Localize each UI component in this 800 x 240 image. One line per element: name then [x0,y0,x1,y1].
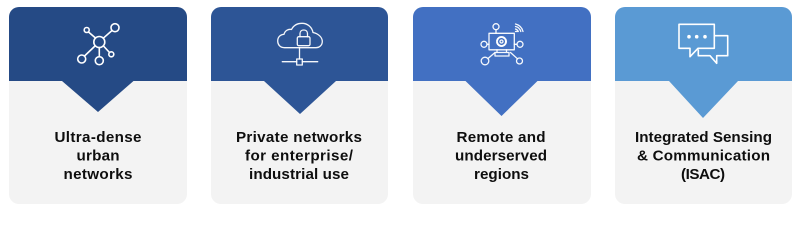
panel: ultra-dense urban networks [9,7,187,204]
label: integrated sensing and communication: (ISAC) [681,166,725,183]
label: private networks [236,129,362,183]
panel: private networks [211,7,388,204]
label: ultra-dense urban networks: networks [64,166,132,183]
label: remote and underserved regions: Remote and [456,129,546,146]
label: private networks: for enterprise/ [245,148,354,164]
card header with pointer [615,7,792,118]
label: ultra-dense urban networks [54,129,142,183]
label: private networks: industrial use [249,166,349,183]
label: remote and underserved regions [455,129,547,183]
card header with pointer [211,7,388,114]
icon: cloud with padlock and network [278,23,322,65]
card body [211,7,388,204]
label: ultra-dense urban networks: Ultra-dense [54,129,142,146]
card header with pointer [9,7,187,112]
icon: network nodes [78,24,119,65]
label: ultra-dense urban networks: urban [76,148,120,164]
icon: speech bubbles [679,24,728,63]
label: remote and underserved regions: regions [474,166,529,183]
label: integrated sensing and communication [635,129,772,183]
panel: remote and underserved regions [413,7,591,204]
card body [9,7,187,204]
card header with pointer [413,7,591,116]
panel: integrated sensing and communication [615,7,792,204]
label: integrated sensing and communication: & Communication [637,148,770,164]
icon: monitor with gear and connected nodes [481,24,523,65]
label: remote and underserved regions: underserved [455,148,547,164]
card body [413,7,591,204]
card body [615,7,792,204]
label: integrated sensing and communication: Integrated Sensing [635,129,772,146]
label: private networks: Private networks [236,129,362,146]
